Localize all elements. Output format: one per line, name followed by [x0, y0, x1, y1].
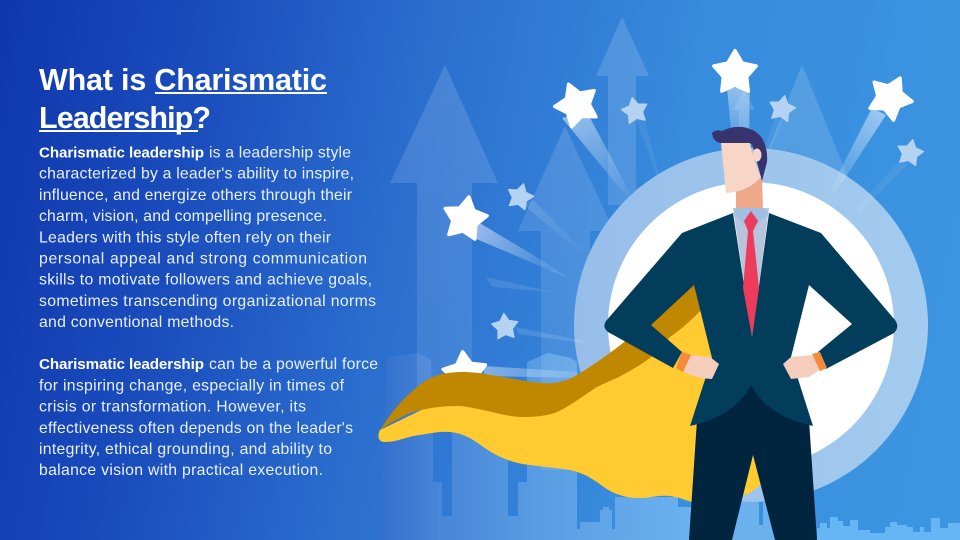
- white stars: [441, 51, 919, 394]
- hair: [712, 127, 767, 181]
- ear: [752, 148, 762, 162]
- right cuff: [812, 352, 827, 371]
- title: What is Charismatic: [39, 63, 327, 97]
- paragraph 2: integrity, ethical grounding, and ability to: [39, 441, 332, 458]
- paragraph 2: effectiveness often depends on the leader's: [39, 420, 353, 437]
- paragraph 2: [39, 356, 378, 479]
- pale star 3: [895, 137, 925, 166]
- star: top left: [549, 76, 604, 130]
- paragraph 2: can be a powerful force: [209, 356, 378, 373]
- pale star 4: [505, 181, 536, 211]
- beam: light star far right: [856, 160, 908, 212]
- beam: star lower left: [484, 366, 578, 378]
- paragraph 1: and conventional methods.: [39, 314, 234, 331]
- arrow: large left: [390, 65, 498, 432]
- paragraph 2: balance vision with practical execution.: [39, 462, 323, 479]
- beam: faint streak: [486, 277, 553, 292]
- paragraph 1: Charismatic leadership: [39, 144, 204, 162]
- pale star 2: [767, 93, 797, 122]
- beam: light star lower: [515, 327, 584, 343]
- beam: star top right: [827, 108, 886, 198]
- light beams: [474, 88, 908, 378]
- paragraph 1: personal appeal and strong communication: [39, 250, 367, 268]
- jacket: [604, 213, 897, 426]
- arrow: right: [755, 65, 850, 260]
- paragraph 1: charm, vision, and compelling presence.: [39, 208, 327, 225]
- beam: star left: [474, 222, 558, 272]
- cape: yellow outer: [378, 285, 780, 502]
- star: top: [714, 51, 756, 91]
- title: [39, 63, 327, 135]
- star: left: [441, 193, 490, 241]
- left hand: [683, 355, 719, 379]
- pale star 1: [620, 95, 650, 124]
- background arrows: [390, 17, 850, 470]
- star: top right: [863, 68, 919, 124]
- paragraph 1: is a leadership style: [209, 144, 351, 162]
- title underline 1: [155, 92, 327, 94]
- arrow: small behind star: [733, 90, 755, 140]
- paragraph 1: skills to motivate followers and achieve goals,: [39, 272, 372, 289]
- beam: light star centre: [636, 118, 660, 178]
- beam: light star right: [764, 118, 783, 155]
- paragraph 1: characterized by a leader's ability to inspire,: [39, 166, 354, 183]
- paragraph 1: [39, 144, 376, 331]
- paragraph 2: crisis or transformation. However, its: [39, 399, 306, 416]
- paragraph 1: sometimes transcending organizational norms: [39, 293, 376, 310]
- cape: dark gold inner: [380, 285, 706, 430]
- right hand: [783, 355, 820, 379]
- trousers: [689, 380, 817, 540]
- pale star 5: [491, 312, 519, 339]
- pale stars: [491, 93, 925, 339]
- beam: light star left: [524, 200, 583, 252]
- paragraph 1: influence, and energize others through their: [39, 187, 352, 204]
- left cuff: [676, 352, 691, 372]
- title: Leadership?: [39, 101, 211, 135]
- skyline right: [812, 517, 960, 540]
- shirt: [733, 208, 769, 337]
- star: lower left: [441, 349, 488, 394]
- city buildings: [381, 353, 780, 540]
- cape: [378, 285, 780, 502]
- tie: [743, 211, 759, 337]
- beam: star top left: [562, 112, 631, 197]
- arrow: middle: [518, 126, 614, 470]
- beam: star top: [727, 88, 750, 150]
- circle ring: [574, 148, 928, 502]
- paragraph 1: Leaders with this style often rely on their: [39, 229, 331, 246]
- face: [721, 143, 761, 193]
- collar: [733, 208, 769, 225]
- beam: faint streak top: [548, 270, 569, 278]
- paragraph 2: Charismatic leadership: [39, 356, 204, 373]
- arrow: tall centre: [596, 17, 649, 205]
- title underline 2: [39, 130, 198, 132]
- neck: [736, 178, 763, 209]
- circle white centre: [608, 182, 894, 468]
- paragraph 2: for inspiring change, especially in times of: [39, 377, 345, 394]
- man: [604, 127, 897, 540]
